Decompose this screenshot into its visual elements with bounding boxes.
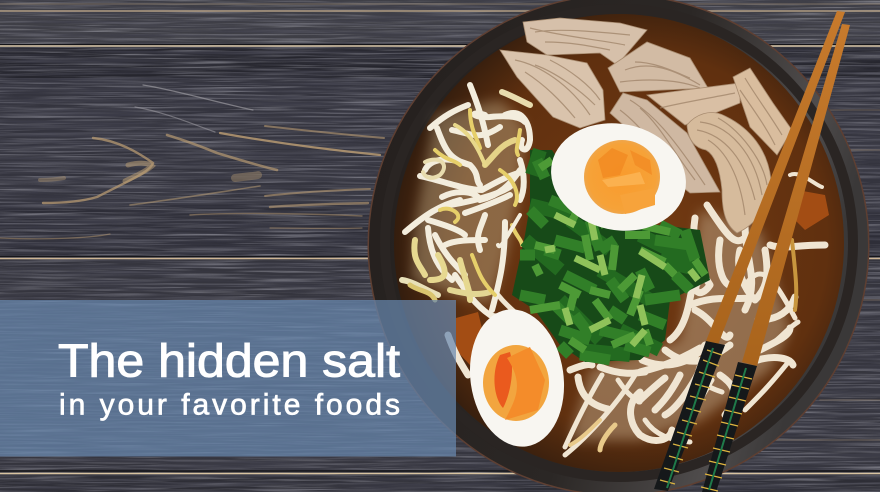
sprout mass shading (412, 100, 525, 305)
ramen bowl (368, 0, 870, 492)
bowl rim (368, 0, 870, 492)
bowl inner wall (385, 9, 853, 477)
green base mass (512, 150, 710, 362)
egg white (461, 303, 573, 453)
chopped green onions (512, 150, 710, 362)
carrot pieces (456, 190, 829, 365)
heading: The hidden salt: The hidden salt (58, 334, 400, 386)
chicken fibres (515, 28, 782, 215)
wood knots and grain (0, 85, 880, 440)
right chopstick (701, 24, 850, 492)
title text block (58, 334, 400, 422)
broth (394, 14, 844, 472)
boiled egg bottom (461, 303, 573, 453)
boiled egg top (541, 111, 696, 243)
chopsticks (654, 11, 850, 492)
subheading: in your favorite foods: in your favorite foods (59, 388, 400, 422)
egg yolk (584, 140, 660, 214)
noodles (448, 174, 825, 455)
egg white (541, 111, 696, 243)
chicken pieces (500, 18, 792, 233)
left chopstick (654, 11, 845, 491)
egg yolk (483, 345, 549, 421)
bean sprouts (402, 85, 530, 316)
translucent blue title panel (0, 300, 456, 456)
noodle mass shading (570, 210, 790, 440)
